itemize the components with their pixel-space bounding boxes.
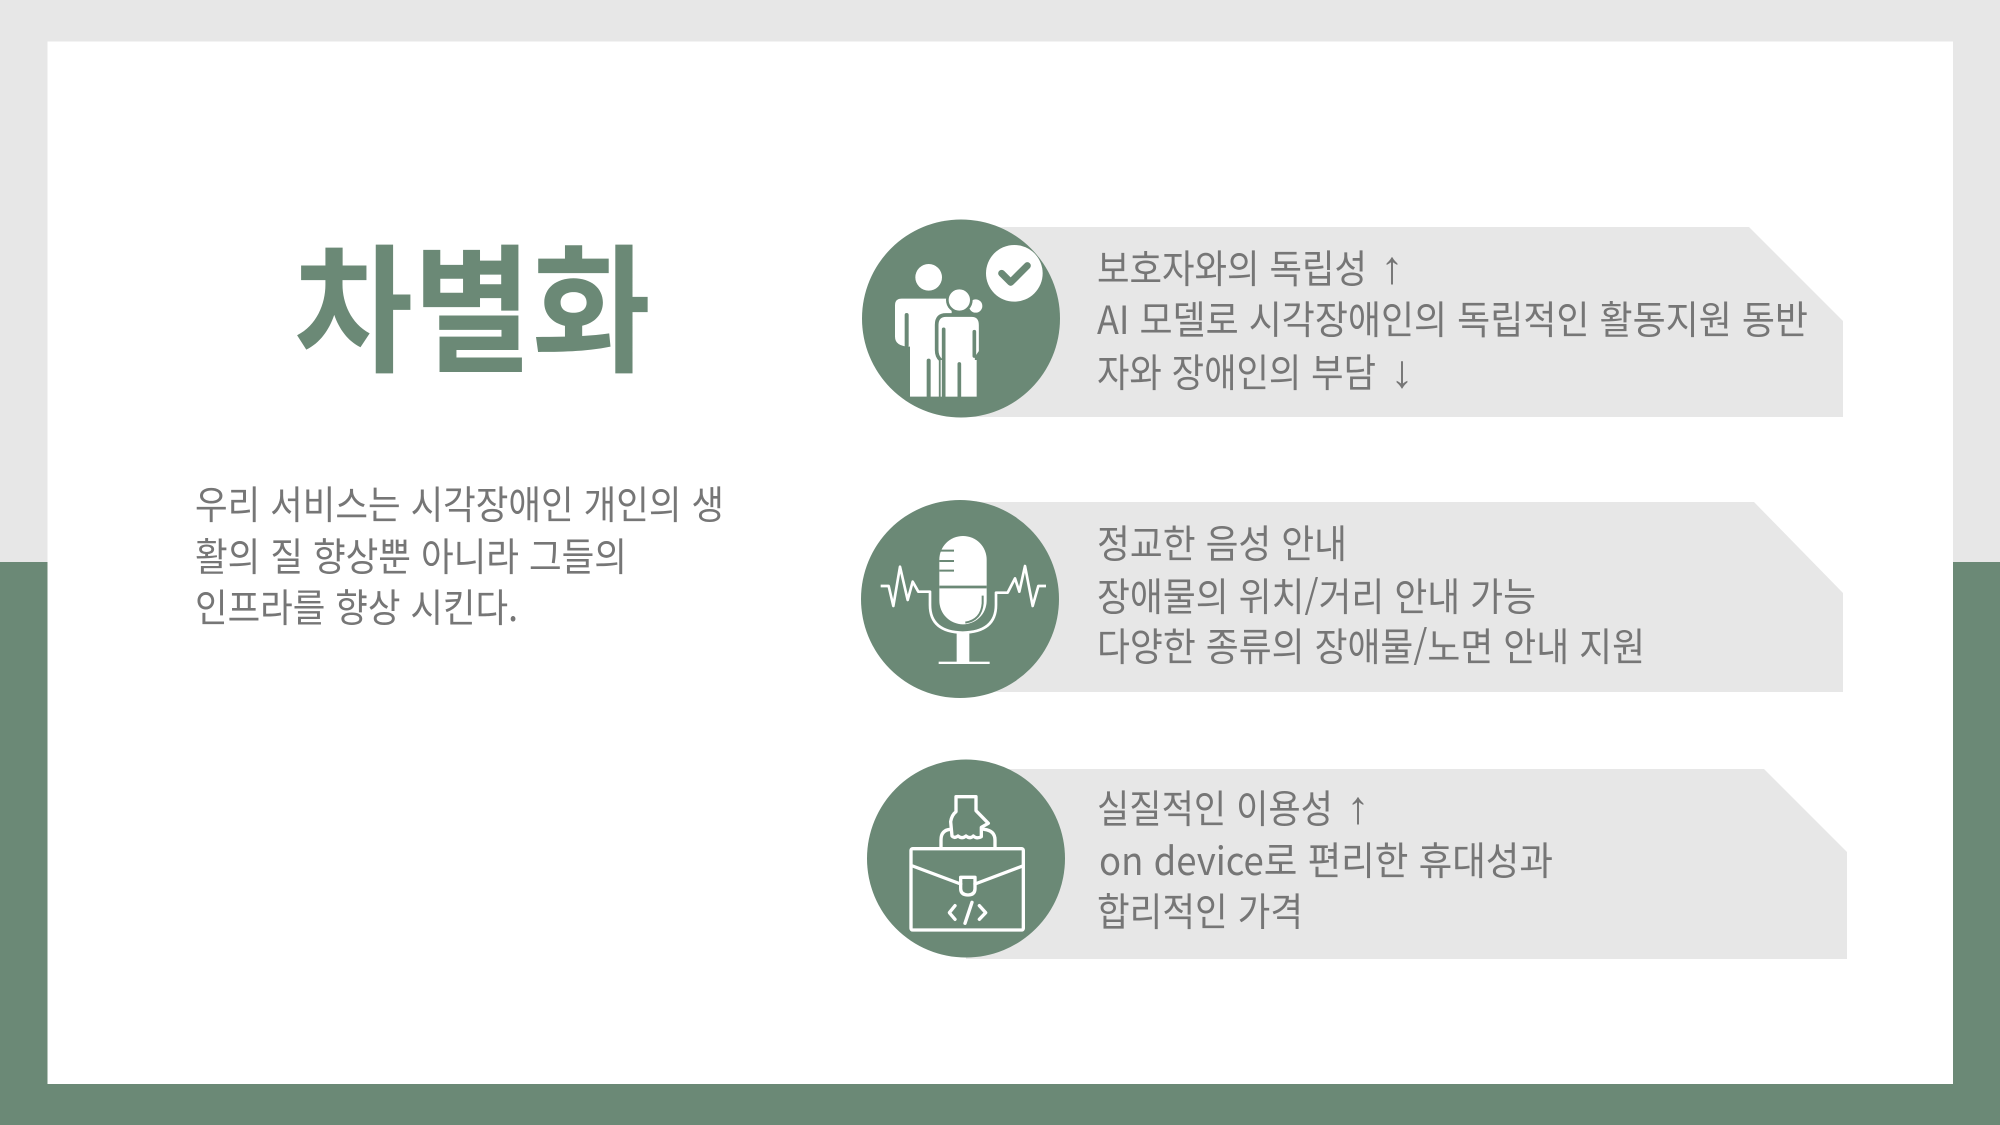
panel text: 실질적인 이용성	[1097, 779, 1333, 835]
intro text block: 우리 서비스는 시각장애인 개인의 생	[195, 475, 724, 531]
panel: guardian independence	[862, 220, 1843, 418]
panel text: 다양한 종류의 장애물/노면 안내 지원	[1097, 617, 1645, 673]
panel: voice guidance	[861, 500, 1843, 698]
panel text: on device로 편리한 휴대성과	[1099, 831, 1553, 887]
panel text	[1097, 779, 1553, 938]
intro text block: 활의 질 향상뿐 아니라 그들의	[195, 527, 627, 583]
icon: hand holding briefcase with code	[911, 797, 1023, 930]
panel text: 합리적인 가격	[1097, 882, 1303, 938]
title: 차별화	[294, 201, 651, 402]
panel: practical usability	[867, 760, 1847, 959]
panel text: 자와 장애인의 부담	[1097, 343, 1376, 399]
panel text: ↓	[1390, 345, 1414, 397]
panel text: AI 모델로 시각장애인의 독립적인 활동지원 동반	[1097, 290, 1808, 346]
icon: microphone with sound waves	[881, 536, 1046, 664]
panel text	[1097, 514, 1645, 673]
intro text block: 인프라를 향상 시킨다.	[195, 578, 518, 634]
panel text: 장애물의 위치/거리 안내 가능	[1097, 567, 1536, 623]
panel text: 보호자와의 독립성	[1097, 239, 1367, 295]
intro text block	[195, 475, 724, 634]
icon: adult and child with check badge	[895, 245, 1043, 397]
panel text: 정교한 음성 안내	[1097, 514, 1347, 570]
panel text: ↑	[1346, 781, 1370, 833]
panel text	[1097, 239, 1808, 399]
panel text: ↑	[1380, 241, 1404, 293]
